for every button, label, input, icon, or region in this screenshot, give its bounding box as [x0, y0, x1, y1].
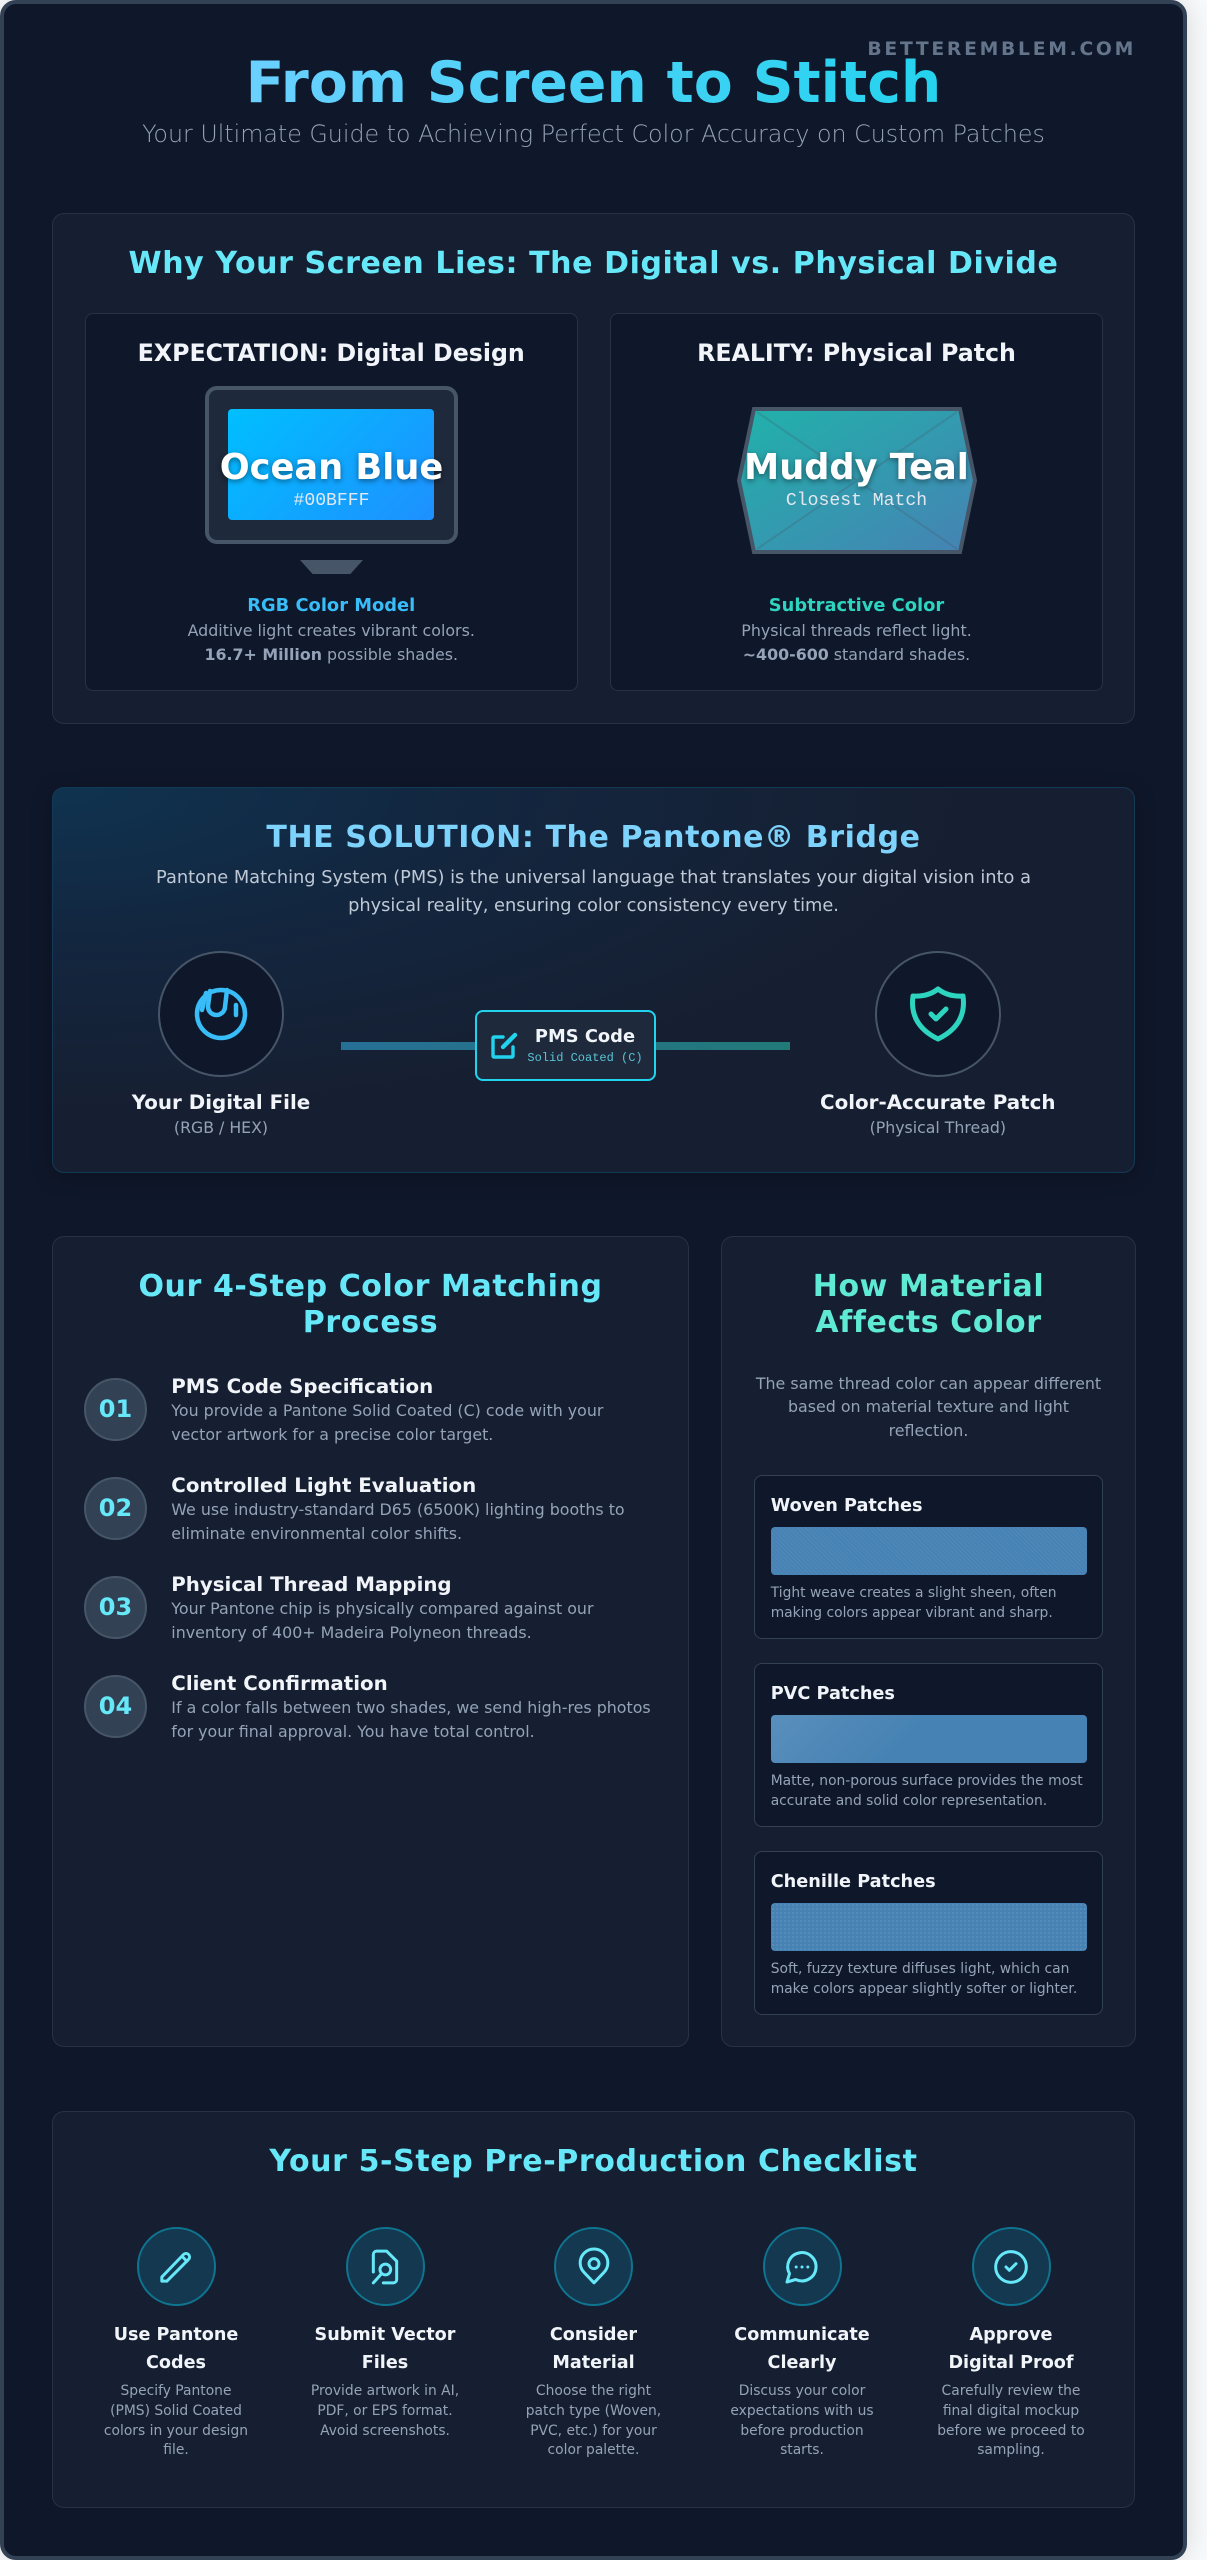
swatch: woven texture	[771, 1527, 1087, 1575]
item description: starts.	[780, 2442, 824, 2458]
swatch name: Ocean Blue	[220, 447, 443, 488]
item title: Submit Vector	[315, 2325, 455, 2345]
icon: stitched patch shape	[737, 407, 977, 554]
step title: Physical Thread Mapping	[171, 1573, 452, 1596]
step number: 04	[99, 1692, 132, 1720]
step description: We use industry-standard D65 (6500K) lighting booths to	[171, 1500, 625, 1519]
panel: four step process	[52, 1236, 689, 2047]
step title: PMS Code Specification	[171, 1375, 433, 1398]
text: material intro: based on material texture and light	[788, 1397, 1069, 1416]
solid coated label: Solid Coated (C)	[527, 1051, 643, 1065]
card description: accurate and solid color representation.	[771, 1793, 1047, 1809]
heading: expectation: EXPECTATION: Digital Design	[138, 339, 525, 367]
heading: how material affects color: Affects Color	[815, 1305, 1042, 1340]
step 03	[84, 1573, 594, 1642]
text: physical threads: ~400-600 standard shades.	[743, 644, 970, 664]
text: additive light: 16.7+ Million possible shades.	[204, 644, 458, 664]
step number: 03	[99, 1593, 132, 1621]
item description: expectations with us	[730, 2403, 874, 2419]
checklist item: consider material	[526, 2227, 661, 2458]
item description: Avoid screenshots.	[320, 2423, 450, 2439]
pms code box	[475, 1010, 656, 1081]
item description: Discuss your color	[739, 2383, 865, 2399]
card description: Soft, fuzzy texture diffuses light, which can	[771, 1961, 1069, 1977]
icon: pencil	[160, 2252, 191, 2283]
card description: making colors appear vibrant and sharp.	[771, 1605, 1053, 1621]
sublabel: rgb hex: (RGB / HEX)	[174, 1118, 268, 1137]
card: chenille patches	[754, 1851, 1103, 2015]
bridge connector line	[341, 1042, 790, 1050]
pms code label: PMS Code	[535, 1026, 635, 1047]
item description	[526, 2383, 661, 2458]
panel: pre-production checklist	[52, 2111, 1135, 2508]
step description: You provide a Pantone Solid Coated (C) code with your	[171, 1401, 603, 1420]
card title: Woven Patches	[771, 1496, 922, 1516]
label: color accurate patch: Color-Accurate Patch	[820, 1091, 1056, 1114]
heading: four step process	[138, 1269, 603, 1340]
patch note: Closest Match	[786, 490, 927, 510]
text: physical threads	[741, 621, 972, 664]
heading: why your screen lies: Why Your Screen Lies: The Digital vs. Physical Divide	[129, 246, 1058, 281]
patch name: Muddy Teal	[744, 447, 969, 488]
item description: final digital mockup	[943, 2403, 1079, 2419]
item description	[937, 2383, 1085, 2458]
checklist item: approve digital proof	[937, 2227, 1085, 2458]
card title: Chenille Patches	[771, 1872, 936, 1892]
step 04	[84, 1672, 651, 1741]
icon: monitor stand	[300, 560, 363, 574]
card description: Tight weave creates a slight sheen, often	[771, 1585, 1057, 1601]
item description	[311, 2383, 459, 2439]
step number: 01	[99, 1395, 132, 1423]
label: rgb color model: RGB Color Model	[247, 594, 415, 616]
item description: before production	[740, 2423, 864, 2439]
step number	[84, 1477, 147, 1540]
panel: digital vs physical divide	[52, 213, 1135, 724]
item title	[550, 2325, 637, 2373]
step description: Your Pantone chip is physically compared against our	[171, 1599, 593, 1618]
step number	[84, 1576, 147, 1639]
item title: Consider	[550, 2325, 637, 2345]
card description: Matte, non-porous surface provides the most	[771, 1773, 1083, 1789]
text: material intro: The same thread color can appear different	[756, 1374, 1101, 1392]
item title: Digital Proof	[948, 2353, 1074, 2373]
item description: patch type (Woven,	[526, 2403, 661, 2419]
card: pvc patches	[754, 1663, 1103, 1827]
icon: shield check circle	[875, 951, 1001, 1077]
title: From Screen to Stitch	[246, 50, 941, 116]
item description: Provide artwork in AI,	[311, 2383, 459, 2399]
item description: PVC, etc.) for your	[530, 2423, 657, 2439]
item title: Clearly	[768, 2353, 836, 2373]
step description	[171, 1599, 594, 1642]
icon circle	[136, 2227, 216, 2306]
checklist item: submit vector files	[311, 2227, 459, 2439]
item title: Approve	[970, 2325, 1052, 2345]
item description: PDF, or EPS format.	[317, 2403, 453, 2419]
card: woven patches	[754, 1475, 1103, 1639]
checklist item: communicate clearly	[730, 2227, 874, 2458]
step 02	[84, 1474, 625, 1543]
checklist item: use pantone codes	[104, 2227, 248, 2458]
item title	[948, 2325, 1074, 2373]
step number: 02	[99, 1494, 132, 1522]
text: pantone description: physical reality, ensuring color consistency every time.	[348, 894, 839, 916]
swatch hex code: #00BFFF	[293, 490, 370, 510]
step description: inventory of 400+ Madeira Polyneon threads.	[171, 1623, 532, 1642]
card description	[770, 1585, 1057, 1621]
text: material intro	[756, 1374, 1101, 1440]
card title: PVC Patches	[771, 1684, 895, 1704]
text: additive light: Additive light creates vibrant colors.	[188, 621, 475, 640]
card description	[771, 1773, 1083, 1809]
swatch: chenille texture	[771, 1903, 1087, 1951]
card description	[771, 1961, 1077, 1997]
step title: Controlled Light Evaluation	[171, 1474, 476, 1497]
swatch: pvc matte	[771, 1715, 1087, 1763]
text: additive light	[188, 621, 475, 664]
icon: file search	[372, 2250, 398, 2284]
panel: material effects	[721, 1236, 1136, 2047]
icon: circle check	[994, 2250, 1028, 2284]
item description: sampling.	[977, 2442, 1045, 2458]
label: subtractive color: Subtractive Color	[769, 594, 944, 616]
icon circle	[346, 2227, 424, 2306]
icon: digital file circle	[158, 951, 284, 1077]
text: pantone description: Pantone Matching System (PMS) is the universal language that translates your digital vision into a	[156, 866, 1031, 888]
label: your digital file: Your Digital File	[132, 1091, 310, 1114]
item description: Choose the right	[536, 2383, 651, 2399]
card description: make colors appear slightly softer or lighter.	[771, 1981, 1077, 1997]
brand label: BETTEREMBLEM.COM	[867, 39, 1136, 60]
text: pantone description	[156, 866, 1031, 916]
item description	[104, 2383, 248, 2458]
step number	[84, 1675, 147, 1738]
heading: four step process: Our 4-Step Color Matching	[138, 1269, 603, 1304]
step description: If a color falls between two shades, we send high-res photos	[171, 1698, 651, 1717]
text: material intro: reflection.	[889, 1421, 968, 1440]
icon: map pin	[578, 2248, 610, 2284]
heading: how material affects color: How Material	[813, 1269, 1044, 1304]
step description: vector artwork for a precise color target.	[171, 1425, 493, 1444]
step description	[171, 1698, 651, 1741]
item description: color palette.	[548, 2442, 639, 2458]
item description: colors in your design	[104, 2423, 248, 2439]
icon circle	[554, 2227, 633, 2306]
icon circle	[762, 2227, 842, 2306]
icon: edit pencil	[491, 1032, 518, 1059]
item title: Codes	[146, 2353, 206, 2373]
step title: Client Confirmation	[171, 1672, 388, 1695]
heading: reality: REALITY: Physical Patch	[697, 339, 1016, 367]
item title: Communicate	[734, 2325, 870, 2345]
item description: before we proceed to	[937, 2423, 1085, 2439]
icon: monitor with ocean blue swatch	[205, 386, 458, 544]
item title: Use Pantone	[114, 2325, 238, 2345]
step number	[84, 1378, 147, 1441]
step description	[171, 1500, 625, 1543]
item description: (PMS) Solid Coated	[110, 2403, 242, 2419]
step description	[171, 1401, 604, 1444]
subtitle: Your Ultimate Guide to Achieving Perfect Color Accuracy on Custom Patches	[142, 120, 1045, 148]
heading: the solution: THE SOLUTION: The Pantone® Bridge	[266, 820, 921, 855]
icon circle	[972, 2227, 1050, 2306]
item title	[114, 2325, 238, 2373]
panel: reality physical patch	[610, 313, 1103, 691]
text: physical threads: Physical threads reflect light.	[741, 621, 972, 640]
step 01	[84, 1375, 604, 1444]
heading: four step process: Process	[303, 1305, 438, 1340]
item title	[315, 2325, 456, 2373]
item description: Specify Pantone	[121, 2383, 231, 2399]
item description: Carefully review the	[942, 2383, 1080, 2399]
panel: pantone bridge solution	[52, 787, 1135, 1173]
item title: Files	[362, 2353, 408, 2373]
item title	[734, 2325, 870, 2373]
heading: checklist: Your 5-Step Pre-Production Checklist	[269, 2144, 918, 2179]
item title: Material	[552, 2353, 635, 2373]
panel: expectation digital design	[85, 313, 578, 691]
step description: for your final approval. You have total control.	[171, 1722, 535, 1741]
item description: file.	[163, 2442, 189, 2458]
screen colour swatch	[228, 409, 434, 520]
sublabel: physical thread: (Physical Thread)	[870, 1118, 1006, 1137]
icon: message bubble	[786, 2251, 818, 2284]
step description: eliminate environmental color shifts.	[171, 1524, 462, 1543]
heading: how material affects color	[813, 1269, 1044, 1340]
item description	[730, 2383, 874, 2458]
